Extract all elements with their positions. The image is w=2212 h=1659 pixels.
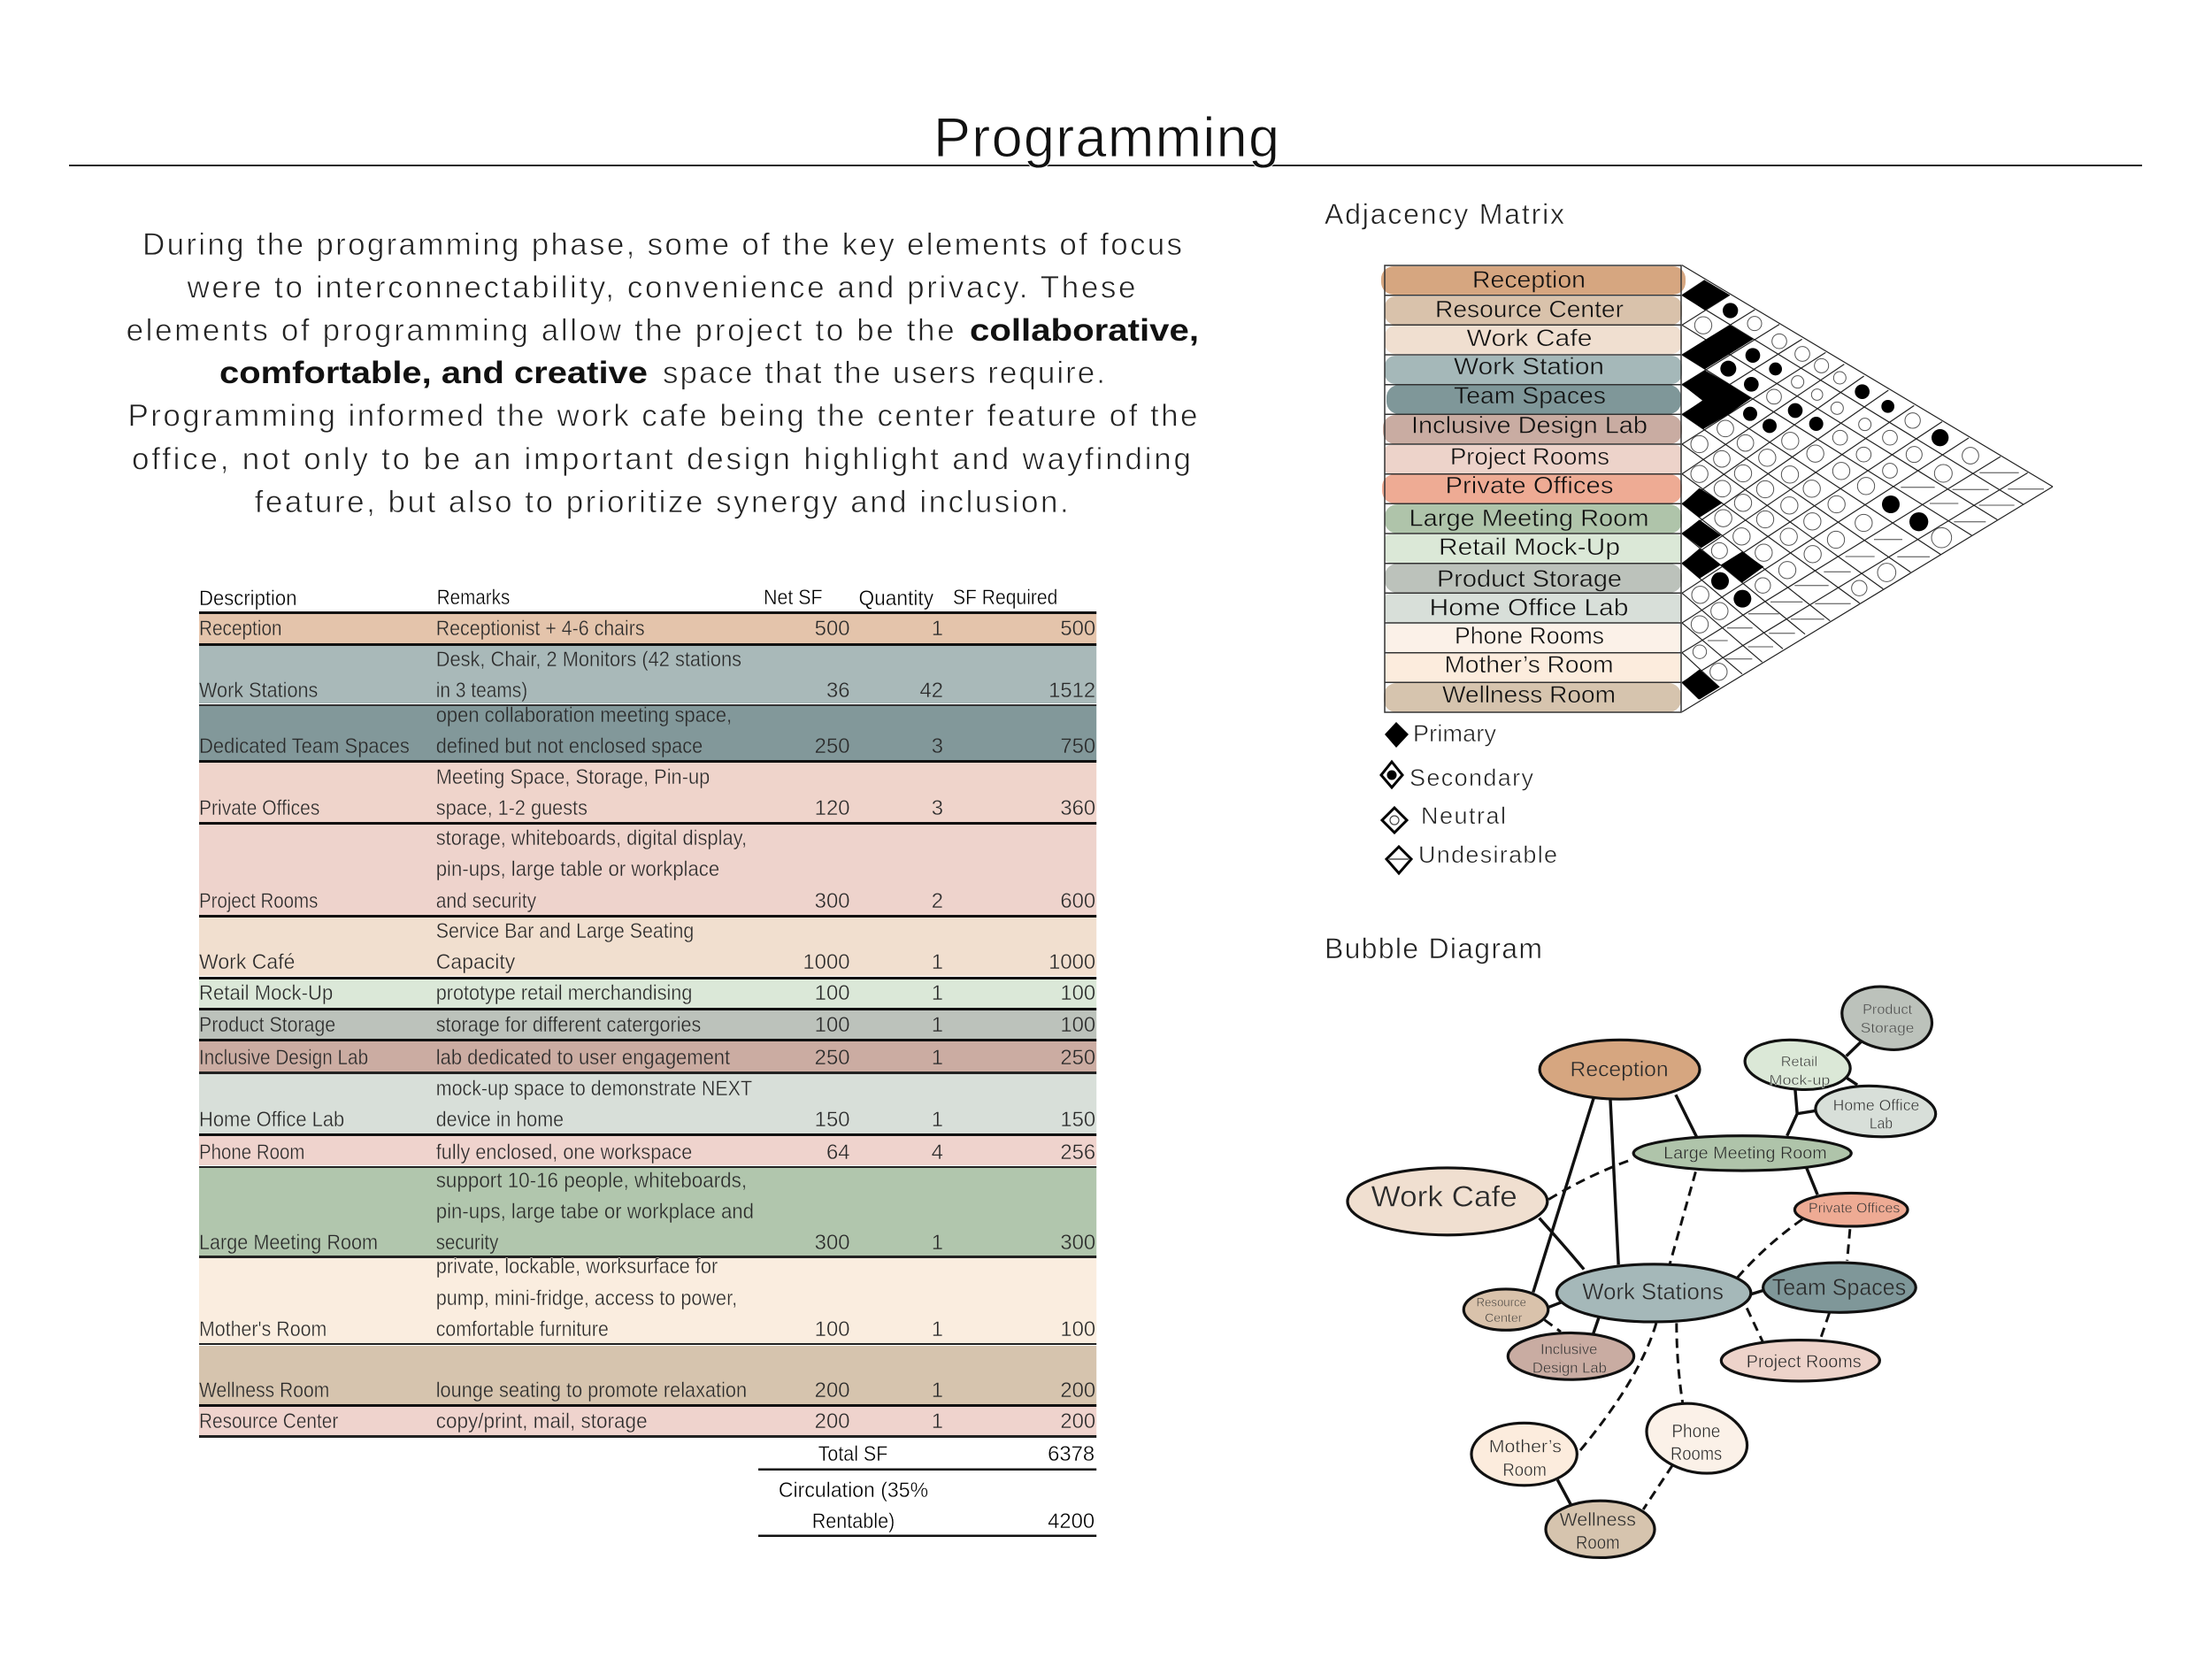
- table header: Remarks: [437, 586, 510, 610]
- circulation: Circulation (35%: [779, 1479, 928, 1502]
- row: Retail Mock-Up: 1: [932, 981, 943, 1005]
- row: Reception: 500: [815, 617, 850, 641]
- row: Product Storage: 1: [932, 1013, 943, 1037]
- bubble: Resource Center: Center: [1485, 1311, 1523, 1325]
- row: Project Rooms: and security: [436, 889, 536, 913]
- matrix row labels: Team Spaces: [1454, 382, 1606, 409]
- row: Private Offices: 120: [815, 796, 850, 820]
- bubble: Mother's Room: Room: [1502, 1460, 1547, 1480]
- bubble: Inclusive Design Lab: Design Lab: [1532, 1359, 1607, 1377]
- row: Resource Center: [199, 1407, 1096, 1438]
- adjacency matrix: [1381, 265, 2053, 712]
- row: Wellness Room: 1: [932, 1379, 943, 1402]
- primary marks: [1682, 280, 1763, 700]
- row: Resource Center: 1: [932, 1409, 943, 1433]
- row: Work Cafe: Service Bar and Large Seating: [436, 919, 694, 943]
- bubble: Work Stations: Work Stations: [1582, 1279, 1724, 1304]
- row: Home Office Lab: device in home: [436, 1108, 564, 1132]
- matrix row labels: Private Offices: [1446, 472, 1614, 499]
- row: Work Cafe: [199, 918, 1096, 979]
- matrix row labels: Inclusive Design Lab: [1411, 412, 1647, 439]
- intro paragraph: feature, but also to prioritize synergy and inclusion.: [255, 485, 1069, 519]
- row: Wellness Room: 200: [815, 1379, 850, 1402]
- bubble: Product Storage: Storage: [1861, 1020, 1914, 1036]
- row: Work Cafe: 1000: [803, 950, 850, 974]
- row: Phone Room: 64: [826, 1141, 850, 1164]
- bubble diagram: [1348, 979, 1938, 1557]
- row: Home Office Lab: Home Office Lab: [199, 1108, 344, 1132]
- bubble: Retail Mock-up: Retail: [1781, 1054, 1817, 1070]
- matrix lattice and relationship marks: [1682, 265, 2053, 712]
- legend: [1381, 720, 1557, 873]
- bubble: Work Cafe: Work Cafe: [1371, 1181, 1517, 1214]
- row: Resource Center: Resource Center: [199, 1409, 338, 1433]
- row: Dedicated Team Spaces: defined but not enclosed space: [436, 734, 703, 758]
- row: Mother's Room: Mother's Room: [199, 1317, 326, 1341]
- bubble: Phone Rooms: Rooms: [1671, 1443, 1722, 1464]
- bubble: Phone Rooms: [1639, 1393, 1755, 1484]
- row: Private Offices: Meeting Space, Storage, Pin-up: [436, 765, 710, 789]
- matrix row labels: Large Meeting Room: [1409, 504, 1649, 531]
- row: Inclusive Design Lab: Inclusive Design Lab: [199, 1046, 368, 1070]
- neutral marks: [1691, 317, 1978, 680]
- row: Retail Mock-Up: prototype retail merchandising: [436, 981, 692, 1005]
- bubble: Wellness Room: Wellness: [1560, 1509, 1636, 1530]
- row: Home Office Lab: 150: [815, 1108, 850, 1132]
- row: Project Rooms: 300: [815, 889, 850, 913]
- row: Dedicated Team Spaces: open collaboration meeting space,: [436, 703, 732, 727]
- bubble: Retail Mock-up: Mock-up: [1770, 1072, 1830, 1088]
- row: Project Rooms: [199, 825, 1096, 918]
- row: Work Cafe: 1: [932, 950, 943, 974]
- row: Mother's Room: pump, mini-fridge, access to power,: [436, 1286, 737, 1310]
- bubble: Team Spaces: Team Spaces: [1772, 1274, 1906, 1301]
- row: Private Offices: [199, 763, 1096, 825]
- table header: [199, 586, 1096, 614]
- row: Large Meeting Room: 300: [1060, 1231, 1095, 1255]
- table header: SF Required: [953, 586, 1057, 610]
- row: Home Office Lab: mock-up space to demonstrate NEXT: [436, 1077, 752, 1101]
- circulation: 4200: [1048, 1509, 1094, 1533]
- row: Phone Room: [199, 1136, 1096, 1168]
- bubble: Reception: [1540, 1040, 1700, 1099]
- bubble: Phone Rooms: Phone: [1671, 1420, 1720, 1441]
- bubble: Product Storage: Product: [1863, 1002, 1913, 1018]
- row: Work Cafe: 1000: [1048, 950, 1095, 974]
- bubble: Home Office Lab: [1814, 1083, 1937, 1140]
- row: Resource Center: 200: [815, 1409, 850, 1433]
- row: Phone Room: 4: [932, 1141, 943, 1164]
- bubble: Resource Center: Resource: [1476, 1296, 1526, 1310]
- row: Private Offices: Private Offices: [199, 796, 319, 820]
- row: Private Offices: 360: [1060, 796, 1095, 820]
- bubble: Team Spaces: [1763, 1263, 1916, 1312]
- table header: Quantity: [858, 587, 933, 611]
- row: Phone Room: 256: [1060, 1141, 1095, 1164]
- row: Work Stations: in 3 teams): [436, 679, 527, 703]
- row: Inclusive Design Lab: lab dedicated to user engagement: [436, 1046, 730, 1070]
- row: Large Meeting Room: 1: [932, 1231, 943, 1255]
- row: Mother's Room: 100: [815, 1317, 850, 1341]
- circulation: Rentable): [812, 1509, 895, 1533]
- bubble: Large Meeting Room: [1633, 1136, 1851, 1171]
- heading: bubble diagram: Bubble Diagram: [1325, 933, 1542, 964]
- row: Work Stations: 42: [919, 679, 943, 703]
- title: Programming: [933, 107, 1279, 169]
- intro paragraph: elements of programming allow the project to be the: [127, 313, 955, 348]
- row: Mother's Room: comfortable furniture: [436, 1317, 609, 1341]
- row: Mother's Room: 100: [1060, 1317, 1095, 1341]
- row: Wellness Room: [199, 1346, 1096, 1407]
- row: Work Cafe: Capacity: [436, 950, 515, 974]
- row: Work Stations: 36: [826, 679, 850, 703]
- row: Dedicated Team Spaces: 750: [1060, 734, 1095, 758]
- legend: neutral: [1382, 803, 1506, 833]
- row: Work Stations: Work Stations: [199, 679, 318, 703]
- secondary connections: [1545, 1159, 1850, 1509]
- row: Mother's Room: 1: [932, 1317, 943, 1341]
- row: Reception: 1: [932, 617, 943, 641]
- intro paragraph: space that the users require.: [663, 356, 1105, 390]
- matrix row labels: Resource Center: [1435, 296, 1624, 322]
- row: Home Office Lab: 1: [932, 1108, 943, 1132]
- matrix row labels: Reception: [1472, 266, 1586, 293]
- matrix row labels: Project Rooms: [1450, 443, 1609, 470]
- bubble: Work Stations: [1556, 1264, 1751, 1322]
- row: Reception: Reception: [199, 617, 282, 641]
- bubble: Inclusive Design Lab: Inclusive: [1540, 1340, 1597, 1358]
- row: Large Meeting Room: Large Meeting Room: [199, 1231, 378, 1255]
- row: Phone Room: Phone Room: [199, 1141, 304, 1164]
- bubble: Inclusive Design Lab: [1508, 1333, 1634, 1379]
- row: Work Stations: Desk, Chair, 2 Monitors (42 stations: [436, 648, 741, 672]
- intro paragraph: comfortable, and creative: [219, 356, 648, 390]
- row: Home Office Lab: [199, 1074, 1096, 1136]
- row: Reception: [199, 614, 1096, 646]
- row: Large Meeting Room: 300: [815, 1231, 850, 1255]
- row: Product Storage: storage for different catergories: [436, 1013, 701, 1037]
- row: Private Offices: space, 1-2 guests: [436, 796, 588, 820]
- row: Phone Room: fully enclosed, one workspace: [436, 1141, 692, 1164]
- row: Reception: Receptionist + 4-6 chairs: [436, 617, 645, 641]
- table header: Description: [199, 587, 296, 611]
- row: Retail Mock-Up: Retail Mock-Up: [199, 981, 333, 1005]
- row: Project Rooms: 2: [932, 889, 943, 913]
- row: Retail Mock-Up: 100: [815, 981, 850, 1005]
- bubble: Retail Mock-up: [1743, 1036, 1853, 1094]
- bubble: Private Offices: Private Offices: [1809, 1201, 1900, 1216]
- bubble: Reception: Reception: [1571, 1058, 1669, 1081]
- legend: neutral: Neutral: [1421, 803, 1506, 829]
- row: Inclusive Design Lab: 1: [932, 1046, 943, 1070]
- bubble: Mother's Room: Mother’s: [1489, 1437, 1562, 1456]
- row: Project Rooms: pin-ups, large table or workplace: [436, 857, 719, 881]
- row: Project Rooms: Project Rooms: [199, 889, 318, 913]
- intro paragraph: were to interconnectability, convenience and privacy. These: [186, 271, 1136, 305]
- total SF: 6378: [1048, 1442, 1094, 1466]
- row: Work Stations: [199, 646, 1096, 706]
- row: Product Storage: [199, 1010, 1096, 1041]
- legend: undesirable: Undesirable: [1418, 841, 1557, 868]
- bubble: Project Rooms: Project Rooms: [1747, 1352, 1862, 1371]
- total SF: [758, 1442, 1096, 1471]
- row: Dedicated Team Spaces: 3: [932, 734, 943, 758]
- secondary marks: [1711, 303, 1948, 608]
- row: Large Meeting Room: support 10-16 people, whiteboards,: [436, 1169, 747, 1193]
- row: Product Storage: 100: [1060, 1013, 1095, 1037]
- legend: secondary: Secondary: [1409, 764, 1534, 791]
- row: Dedicated Team Spaces: 250: [815, 734, 850, 758]
- intro paragraph: [127, 227, 1199, 519]
- intro paragraph: collaborative,: [970, 313, 1199, 348]
- row: Large Meeting Room: pin-ups, large tabe or workplace and: [436, 1200, 754, 1224]
- undesirable marks: [1708, 472, 2044, 659]
- row: Work Stations: 1512: [1048, 679, 1095, 703]
- matrix row labels: [1381, 265, 1686, 712]
- matrix row labels: Retail Mock-Up: [1439, 534, 1620, 560]
- row: Inclusive Design Lab: 250: [1060, 1046, 1095, 1070]
- bubble: Wellness Room: Room: [1576, 1532, 1620, 1554]
- intro paragraph: office, not only to be an important design highlight and wayfinding: [132, 442, 1191, 477]
- row: Work Cafe: Work Café: [199, 950, 295, 974]
- bubble: Home Office Lab: Home Office: [1833, 1096, 1919, 1114]
- row: Wellness Room: Wellness Room: [199, 1379, 329, 1402]
- total SF: Total SF: [818, 1442, 887, 1466]
- row: Project Rooms: storage, whiteboards, digital display,: [436, 826, 747, 850]
- row: Inclusive Design Lab: [199, 1041, 1096, 1074]
- matrix row labels: Work Cafe: [1467, 325, 1593, 351]
- table header: Net SF: [764, 586, 823, 610]
- row: Private Offices: 3: [932, 796, 943, 820]
- bubble: Resource Center: [1463, 1289, 1548, 1330]
- row: Mother's Room: [199, 1255, 1096, 1345]
- bubble: Private Offices: [1794, 1193, 1908, 1226]
- bubble: Project Rooms: [1721, 1340, 1879, 1381]
- row: Dedicated Team Spaces: [199, 703, 1096, 763]
- matrix row labels: Product Storage: [1437, 565, 1622, 592]
- row: Large Meeting Room: security: [436, 1231, 498, 1255]
- row: Product Storage: 100: [815, 1013, 850, 1037]
- row: Mother's Room: private, lockable, worksurface for: [436, 1255, 718, 1279]
- row: Large Meeting Room: [199, 1168, 1096, 1258]
- matrix row labels: Mother’s Room: [1444, 651, 1614, 678]
- intro paragraph: During the programming phase, some of the key elements of focus: [142, 227, 1182, 262]
- program table: [199, 586, 1096, 1537]
- primary connections: [1533, 1041, 1862, 1505]
- row: Wellness Room: lounge seating to promote relaxation: [436, 1379, 747, 1402]
- matrix row labels: Home Office Lab: [1430, 595, 1628, 621]
- row: Reception: 500: [1060, 617, 1095, 641]
- legend: primary: Primary: [1413, 720, 1497, 747]
- bubble: Large Meeting Room: Large Meeting Room: [1663, 1144, 1827, 1164]
- intro paragraph: Programming informed the work cafe being the center feature of the: [127, 399, 1198, 434]
- circulation: [758, 1479, 1096, 1537]
- legend: undesirable: [1386, 841, 1557, 873]
- row: Product Storage: Product Storage: [199, 1013, 335, 1037]
- matrix row labels: Phone Rooms: [1455, 623, 1604, 649]
- row: Resource Center: 200: [1060, 1409, 1095, 1433]
- bubble: Work Cafe: [1348, 1168, 1548, 1235]
- row: Dedicated Team Spaces: Dedicated Team Spaces: [199, 734, 410, 758]
- row: Resource Center: copy/print, mail, storage: [436, 1409, 648, 1433]
- matrix row labels: Wellness Room: [1442, 681, 1616, 708]
- row: Wellness Room: 200: [1060, 1379, 1095, 1402]
- matrix row labels: Work Station: [1454, 353, 1604, 380]
- row: Inclusive Design Lab: 250: [815, 1046, 850, 1070]
- bubble: Mother's Room: [1471, 1423, 1577, 1486]
- row: Retail Mock-Up: [199, 979, 1096, 1010]
- row: Project Rooms: 600: [1060, 889, 1095, 913]
- heading: adjacency matrix: Adjacency Matrix: [1325, 198, 1564, 230]
- bubble: Home Office Lab: Lab: [1870, 1114, 1893, 1132]
- row: Home Office Lab: 150: [1060, 1108, 1095, 1132]
- row: Retail Mock-Up: 100: [1060, 981, 1095, 1005]
- bubble: Product Storage: [1836, 979, 1938, 1057]
- bubble: Wellness Room: [1546, 1501, 1655, 1557]
